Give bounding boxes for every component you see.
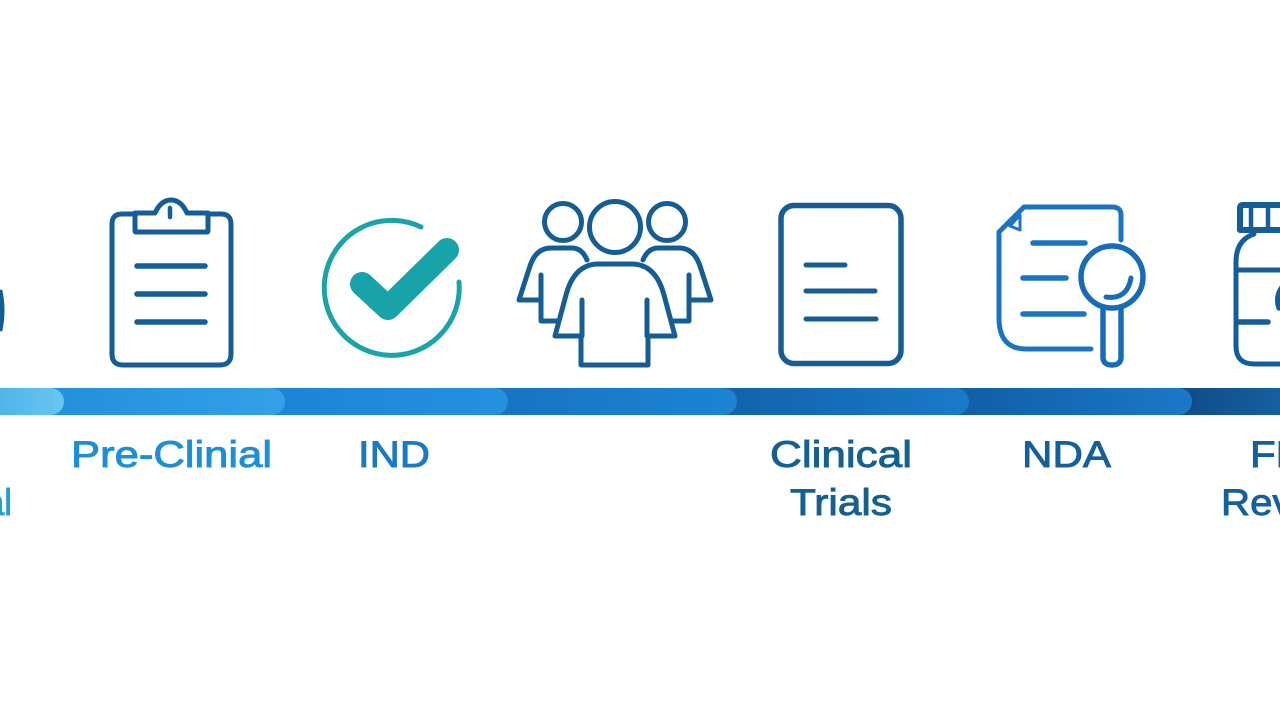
timeline bar: [0, 388, 1280, 415]
label: Clinical Trials: Trials: [790, 482, 892, 523]
icon: check mark in circle: [324, 220, 459, 355]
icon: document with magnifier: [999, 207, 1143, 365]
icon: cropped discovery circle at left edge: [0, 290, 2, 331]
label: IND: IND: [358, 434, 430, 475]
label: Clinical Trials: Clinical: [770, 434, 912, 475]
label: NDA: NDA: [1022, 434, 1111, 475]
icon: clipboard: [112, 200, 231, 365]
label: Clinical Trials: [770, 434, 912, 523]
icon: document: [781, 206, 901, 364]
label: FDA Review: [1221, 434, 1280, 523]
label: Pre-Clinial: Pre-Clinial: [71, 434, 272, 475]
icon: group of people: [519, 202, 711, 365]
icon: medicine bottle: [1236, 205, 1280, 364]
